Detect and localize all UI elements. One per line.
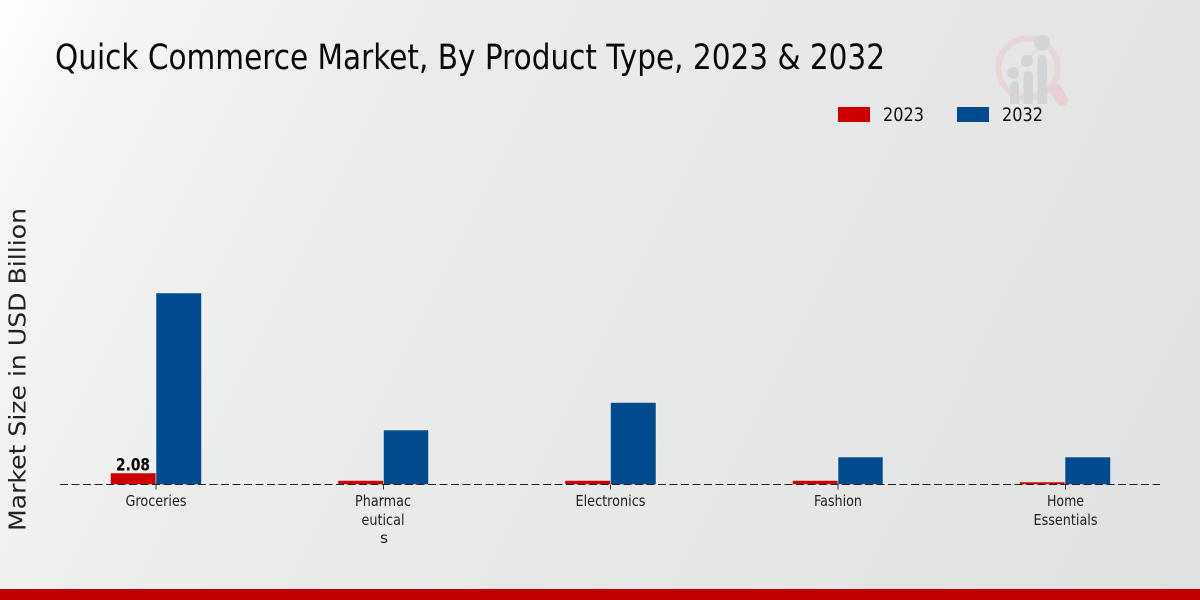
bar chart [60, 293, 1160, 490]
legend [838, 104, 1043, 126]
title: Quick Commerce Market, By Product Type, 2023 & 2032 [55, 38, 885, 78]
y-axis label: Market Size in USD Billion [6, 208, 32, 531]
category label: Pharmaceuticals: eutical [362, 511, 404, 529]
category label: Electronics: Electronics [576, 492, 646, 510]
footer bar [0, 589, 1200, 600]
legend swatch: 2032 [957, 107, 989, 122]
bars: Pharmaceuticals [338, 430, 428, 484]
icon: watermark logo [998, 35, 1062, 104]
category label: Home Essentials: Home [1047, 492, 1084, 510]
category label: Pharmaceuticals: Pharmac [355, 492, 411, 510]
bars: Electronics [565, 402, 656, 484]
category label: Home Essentials [1034, 492, 1098, 529]
bars: Fashion [792, 457, 883, 484]
bars: Groceries [110, 293, 202, 484]
category label: Pharmaceuticals [355, 492, 411, 547]
legend label: 2032: 2032 [1002, 104, 1043, 126]
category label: Fashion: Fashion [814, 492, 862, 510]
category label: Pharmaceuticals: s [380, 529, 388, 547]
bars: Home Essentials [1020, 457, 1110, 484]
legend label: 2023: 2023 [883, 104, 924, 126]
legend swatch: 2023 [838, 107, 870, 122]
category label: Groceries: Groceries [126, 492, 186, 510]
data label: 2.08: 2.08 [116, 456, 150, 474]
category label: Home Essentials: Essentials [1034, 511, 1098, 529]
